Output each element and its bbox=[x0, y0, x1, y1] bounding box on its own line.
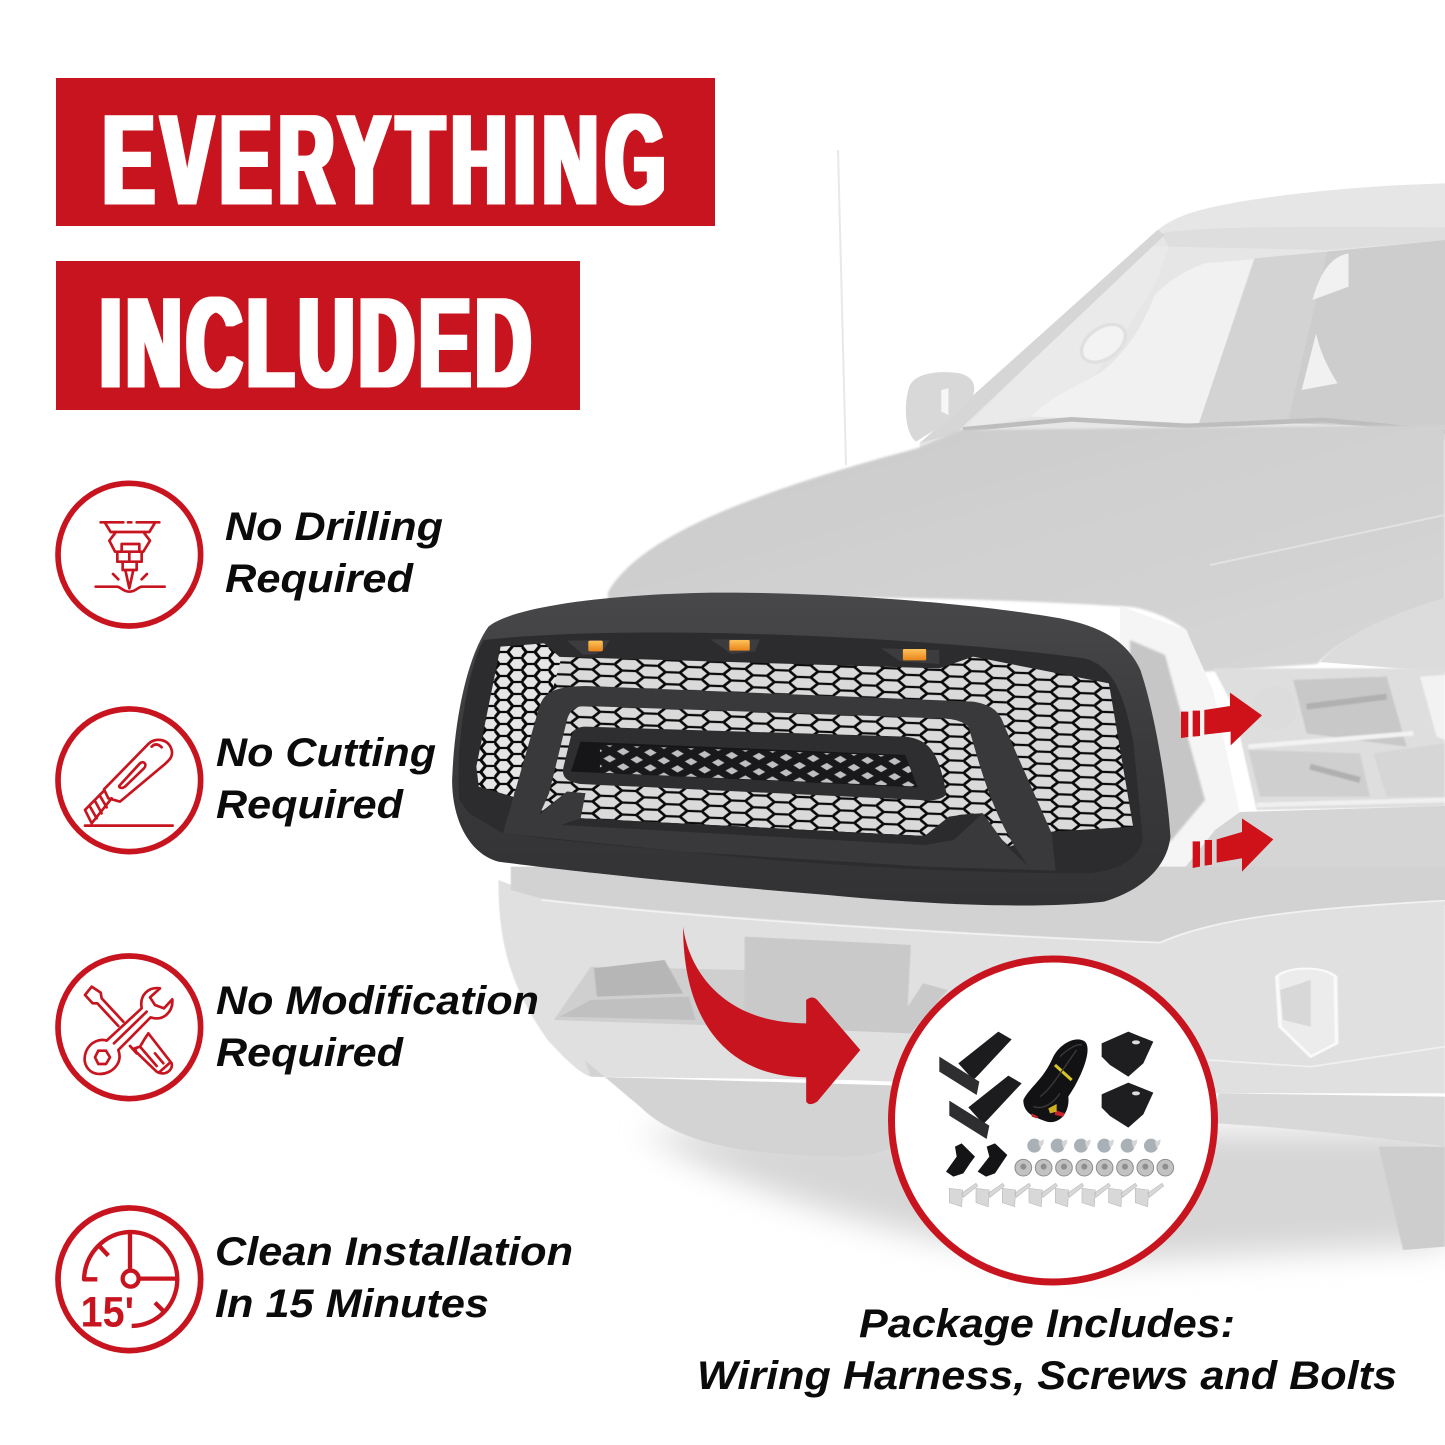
push clips bbox=[946, 1143, 1007, 1177]
intake bbox=[554, 967, 751, 1027]
truck shadow on ground bbox=[640, 1130, 1445, 1262]
headlight bbox=[1213, 668, 1445, 810]
main product: black grille bbox=[452, 593, 1170, 906]
amber marker lights bbox=[567, 639, 939, 664]
curved arrow to package bbox=[683, 927, 860, 1104]
package contents circle bbox=[892, 959, 1214, 1282]
light bar frame bbox=[563, 727, 947, 801]
text: no cutting: Required bbox=[216, 783, 405, 827]
angle brackets bbox=[1102, 1032, 1153, 1128]
hood bbox=[608, 425, 1445, 672]
lower panel recess shading bbox=[561, 813, 983, 845]
heading: EVERYTHING: EVERYTHING bbox=[103, 89, 665, 232]
license plate bbox=[745, 937, 948, 1033]
text: no modification: No Modification bbox=[216, 979, 539, 1023]
screws bbox=[1027, 1139, 1161, 1153]
text: no cutting: No Cutting bbox=[216, 731, 436, 775]
heading: INCLUDED: INCLUDED bbox=[100, 272, 531, 415]
icon: wrench and screwdriver bbox=[58, 956, 201, 1099]
text: clean installation: In 15 Minutes bbox=[215, 1282, 489, 1326]
T-bolts bbox=[949, 1183, 1164, 1207]
fog light bbox=[1277, 969, 1337, 1057]
arrow: upper mounting point bbox=[1181, 693, 1262, 745]
15 minutes label: 15' bbox=[81, 1289, 134, 1337]
long brackets bbox=[939, 1032, 1022, 1139]
icon: drill bbox=[58, 483, 201, 626]
fender bbox=[1320, 598, 1445, 672]
cab and windshield bbox=[906, 183, 1445, 450]
arch bar and lower panel bbox=[503, 686, 1056, 871]
icon: utility knife bbox=[58, 709, 201, 852]
chrome grille surround bbox=[1120, 606, 1240, 880]
arrow: lower mounting point bbox=[1193, 818, 1273, 872]
honeycomb mesh left bbox=[476, 643, 561, 797]
grille inner frame bbox=[458, 632, 1143, 873]
text: package includes: Package Includes: bbox=[859, 1302, 1235, 1346]
text: no modification: Required bbox=[216, 1031, 405, 1075]
truck grille behind bbox=[1130, 640, 1205, 842]
side mirror bbox=[906, 372, 974, 442]
text: package includes: Wiring Harness, Screws and Bolts bbox=[697, 1354, 1397, 1398]
text: clean installation: Clean Installation bbox=[215, 1230, 573, 1274]
grille outer frame bbox=[452, 593, 1170, 906]
text: no drilling: Required bbox=[225, 557, 415, 601]
light bar mesh bbox=[571, 742, 917, 787]
upper fascia below headlight bbox=[1120, 806, 1445, 932]
honeycomb mesh right bbox=[513, 657, 1133, 847]
lower valance bbox=[585, 1060, 935, 1157]
bumper bbox=[498, 867, 1445, 1250]
background truck photo bbox=[498, 150, 1445, 1262]
wiring harness bbox=[1023, 1039, 1088, 1122]
nuts bbox=[1015, 1159, 1174, 1176]
wipers bbox=[963, 419, 1445, 432]
text: no drilling: No Drilling bbox=[225, 505, 443, 549]
icon: 15 minute clock bbox=[58, 1208, 201, 1351]
antenna bbox=[838, 150, 846, 465]
